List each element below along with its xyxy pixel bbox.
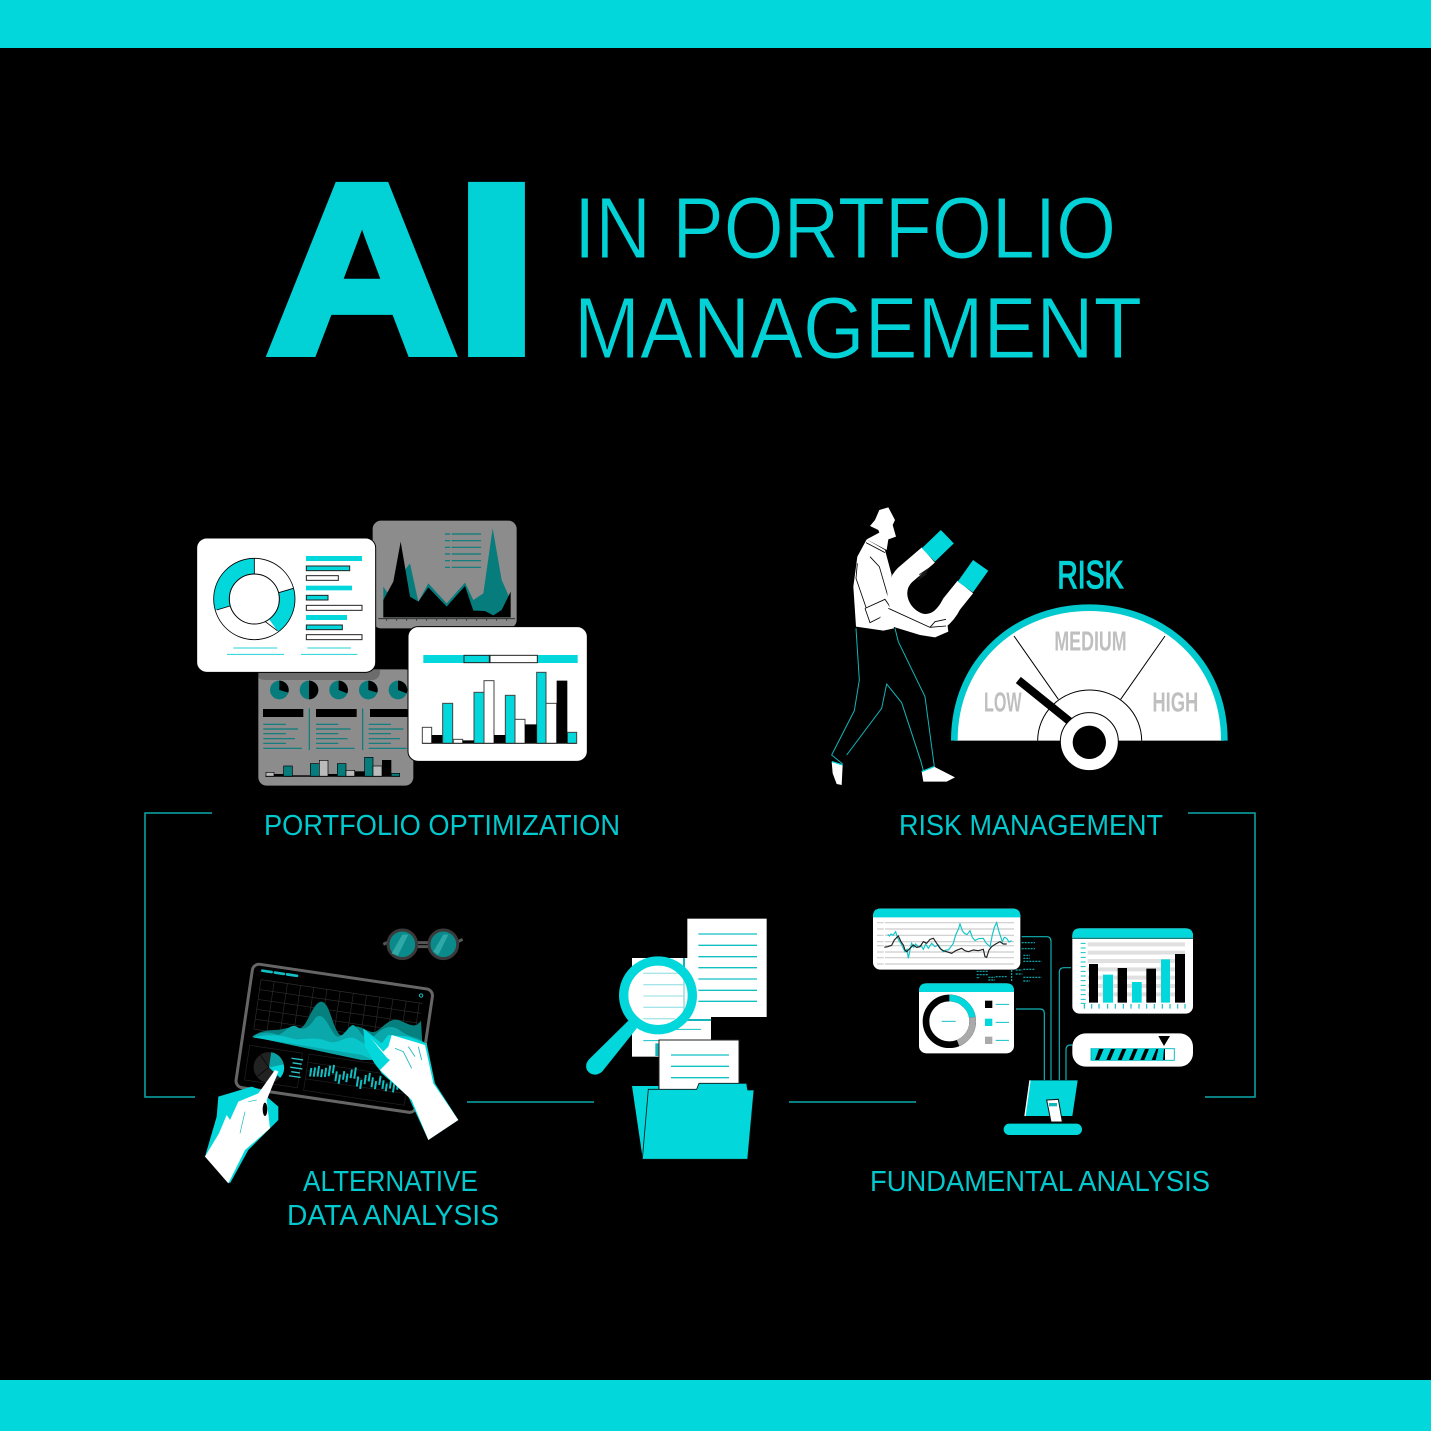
illustration: alternative data tablet [205, 930, 463, 1183]
man with magnet [832, 507, 981, 785]
gauge label high: HIGH [1152, 687, 1198, 718]
label: alternative data analysis [287, 1166, 499, 1232]
card: bar chart [1072, 928, 1193, 1014]
label: portfolio optimization: PORTFOLIO OPTIMIZATION [264, 810, 620, 842]
gauge dial [954, 608, 1224, 771]
label: risk management: RISK MANAGEMENT [899, 810, 1163, 842]
gauge hub [1060, 713, 1118, 771]
back document [632, 958, 711, 1057]
area chart [252, 1002, 425, 1063]
head and neck [867, 507, 896, 550]
title: in portfolio: IN PORTFOLIO [574, 180, 1116, 277]
torso [853, 539, 894, 631]
title: management: MANAGEMENT [574, 280, 1142, 377]
card: progress bar [1072, 1033, 1193, 1067]
label line: data analysis: DATA ANALYSIS [287, 1200, 499, 1232]
magnifier [586, 961, 692, 1075]
glasses [383, 930, 463, 959]
gauge label low: LOW [984, 687, 1022, 718]
monitor [1004, 1080, 1082, 1135]
magnet [897, 555, 965, 624]
label line: alternative: ALTERNATIVE [303, 1166, 478, 1198]
gauge label medium: MEDIUM [1054, 625, 1127, 656]
gray area chart card [373, 521, 517, 628]
legs outline [832, 628, 934, 771]
white bar chart card [408, 627, 587, 761]
label: fundamental analysis: FUNDAMENTAL ANALYSIS [870, 1166, 1210, 1198]
gauge needle [1018, 680, 1070, 722]
top band [0, 0, 1431, 48]
title [267, 135, 1142, 403]
card: donut chart [919, 983, 1014, 1053]
illustration: portfolio optimization dashboards [197, 521, 587, 786]
illustration: fundamental analysis dashboards [873, 909, 1193, 1135]
connector lines [977, 937, 1072, 1080]
folder front [642, 1083, 754, 1159]
front document [659, 1040, 739, 1093]
candlestick chart [309, 1061, 399, 1094]
hand: right [363, 1028, 458, 1140]
illustration: documents, magnifier and folder [586, 919, 767, 1159]
shoes [832, 762, 955, 785]
white donut card [197, 538, 376, 672]
hand: left [205, 1068, 280, 1183]
illustration: risk gauge and man with magnet [832, 507, 1224, 785]
gauge heading RISK: RISK [1057, 553, 1123, 597]
bottom band [0, 1380, 1431, 1431]
title: AI: I [454, 135, 539, 403]
connector frame lines [145, 813, 1255, 1102]
forearm and hand [877, 608, 948, 637]
tablet [235, 963, 433, 1113]
folder back [632, 1086, 753, 1158]
card: line chart [873, 909, 1020, 970]
gray pies and bars card [258, 669, 413, 786]
right document [687, 919, 767, 1017]
title: AI: A [267, 135, 457, 403]
